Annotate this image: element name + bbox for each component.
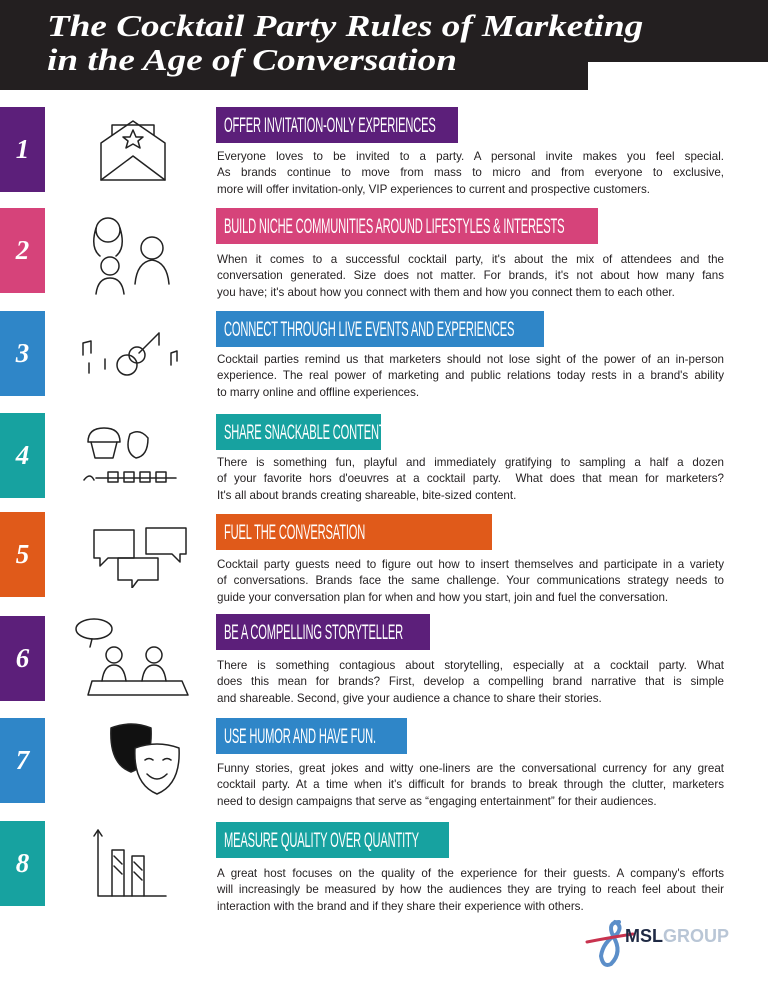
title <box>48 14 642 76</box>
text 1: more will offer invitation-only, VIP experiences to current and prospective customers. <box>217 183 650 196</box>
heading 4: SHARE SNACKABLE CONTENT <box>224 421 381 444</box>
text 1 <box>217 150 724 196</box>
text 7: need to design campaigns that serve as “engaging entertainment” for their audiences. <box>217 795 657 808</box>
text 8: will increasingly be measured by how the audiences they are trying to reach feel about their <box>217 883 724 896</box>
text 2 <box>217 253 724 299</box>
heading 4 <box>216 414 381 450</box>
heading 3 <box>216 311 544 347</box>
text 3 <box>217 353 724 399</box>
heading 7: USE HUMOR AND HAVE FUN. <box>224 725 376 748</box>
number 7 <box>0 718 45 803</box>
number 3 <box>0 311 45 396</box>
heading 5: FUEL THE CONVERSATION <box>224 521 365 544</box>
text 2: When it comes to a successful cocktail party, it's about the mix of attendees and the <box>217 253 724 266</box>
heading 5 <box>216 514 492 550</box>
text 5: Cocktail party guests need to figure out how to insert themselves and participate in a variety <box>217 558 724 571</box>
heading 2 <box>216 208 598 244</box>
text 7: Funny stories, great jokes and witty one-liners are the conversational currency for any great <box>217 762 724 775</box>
number 1 <box>0 107 45 192</box>
heading 1: OFFER INVITATION-ONLY EXPERIENCES <box>224 114 436 137</box>
number 5 <box>0 512 45 597</box>
number 6 <box>0 616 45 701</box>
logo: MSLGROUP <box>586 920 729 967</box>
text 8: A great host focuses on the quality of the experience for their guests. A company's efforts <box>217 867 724 880</box>
title: The Cocktail Party Rules of Marketing <box>47 8 643 43</box>
number 8: 8 <box>16 848 29 878</box>
number 6: 6 <box>16 643 29 673</box>
text 5 <box>217 558 724 604</box>
text 8: interaction with the brand and if they share their experience with others. <box>217 900 584 913</box>
icon: envelope <box>100 120 166 181</box>
text 2: you have; it's about how you connect with them and how you connect them to each other. <box>217 286 675 299</box>
text 3: Cocktail parties remind us that marketers should not lose sight of the power of an in-person <box>217 353 724 366</box>
heading 1 <box>216 107 458 143</box>
icon: guitar and notes <box>82 332 178 376</box>
text 4: It's all about brands creating shareable, bite-sized content. <box>217 489 516 502</box>
number 2 <box>0 208 45 293</box>
text 3: experience. The real power of marketing and public relations today rests in a brand's ability <box>217 369 724 382</box>
text 6 <box>217 659 724 705</box>
title: in the Age of Conversation <box>47 42 457 77</box>
icon: theatre masks <box>110 723 180 795</box>
text 6: There is something contagious about storytelling, especially at a cocktail party. What <box>217 659 724 672</box>
heading 2: BUILD NICHE COMMUNITIES AROUND LIFESTYLES & INTERESTS <box>224 215 564 238</box>
text 1: As brands continue to move from mass to micro and from everyone to exclusive, <box>217 166 724 179</box>
heading 6: BE A COMPELLING STORYTELLER <box>224 621 403 644</box>
heading 8: MEASURE QUALITY OVER QUANTITY <box>224 829 419 852</box>
number 4: 4 <box>16 440 29 470</box>
icon: bar chart <box>93 829 167 897</box>
title bar <box>0 0 768 90</box>
number 2: 2 <box>16 235 29 265</box>
text 6: does this mean for brands? First, develop a compelling brand narrative that is simple <box>217 675 724 688</box>
text 1: Everyone loves to be invited to a party. A personal invite makes you feel special. <box>217 150 724 163</box>
text 4 <box>217 456 724 502</box>
text 8 <box>217 867 724 913</box>
icon: snacks <box>83 427 177 483</box>
text 5: guide your conversation plan for when and how you start, join and fuel the conversation. <box>217 591 668 604</box>
text 4: There is something fun, playful and immediately gratifying to sampling a half a dozen <box>217 456 724 469</box>
number 1: 1 <box>16 134 29 164</box>
text 7 <box>217 762 724 808</box>
heading 8 <box>216 822 449 858</box>
icon: storytellers <box>75 618 189 696</box>
text 3: to marry online and offline experiences. <box>217 386 419 399</box>
icon: speech bubbles <box>93 527 187 588</box>
heading 6 <box>216 614 430 650</box>
text 6: and shareable. Second, give your audience a chance to share their stories. <box>217 692 602 705</box>
number 7: 7 <box>16 745 29 775</box>
text 7: cocktail party. At a time when it's difficult for brands to break through the clutter, marketers <box>217 778 724 791</box>
heading 3: CONNECT THROUGH LIVE EVENTS AND EXPERIENCES <box>224 318 514 341</box>
text 4: of your favorite hors d'oeuvres at a cocktail party. What does that mean for marketers? <box>217 472 724 485</box>
logo: MSLGROUP: MSLGROUP <box>625 926 729 946</box>
number 5: 5 <box>16 539 29 569</box>
number 3: 3 <box>16 338 29 368</box>
icon: people <box>93 217 170 295</box>
number 4 <box>0 413 45 498</box>
number 8 <box>0 821 45 906</box>
text 5: of conversations. Brands face the same challenge. Your communications strategy needs to <box>217 574 724 587</box>
heading 7 <box>216 718 407 754</box>
text 2: conversation generated. Size does not matter. For brands, it's not about how many fans <box>217 269 724 282</box>
